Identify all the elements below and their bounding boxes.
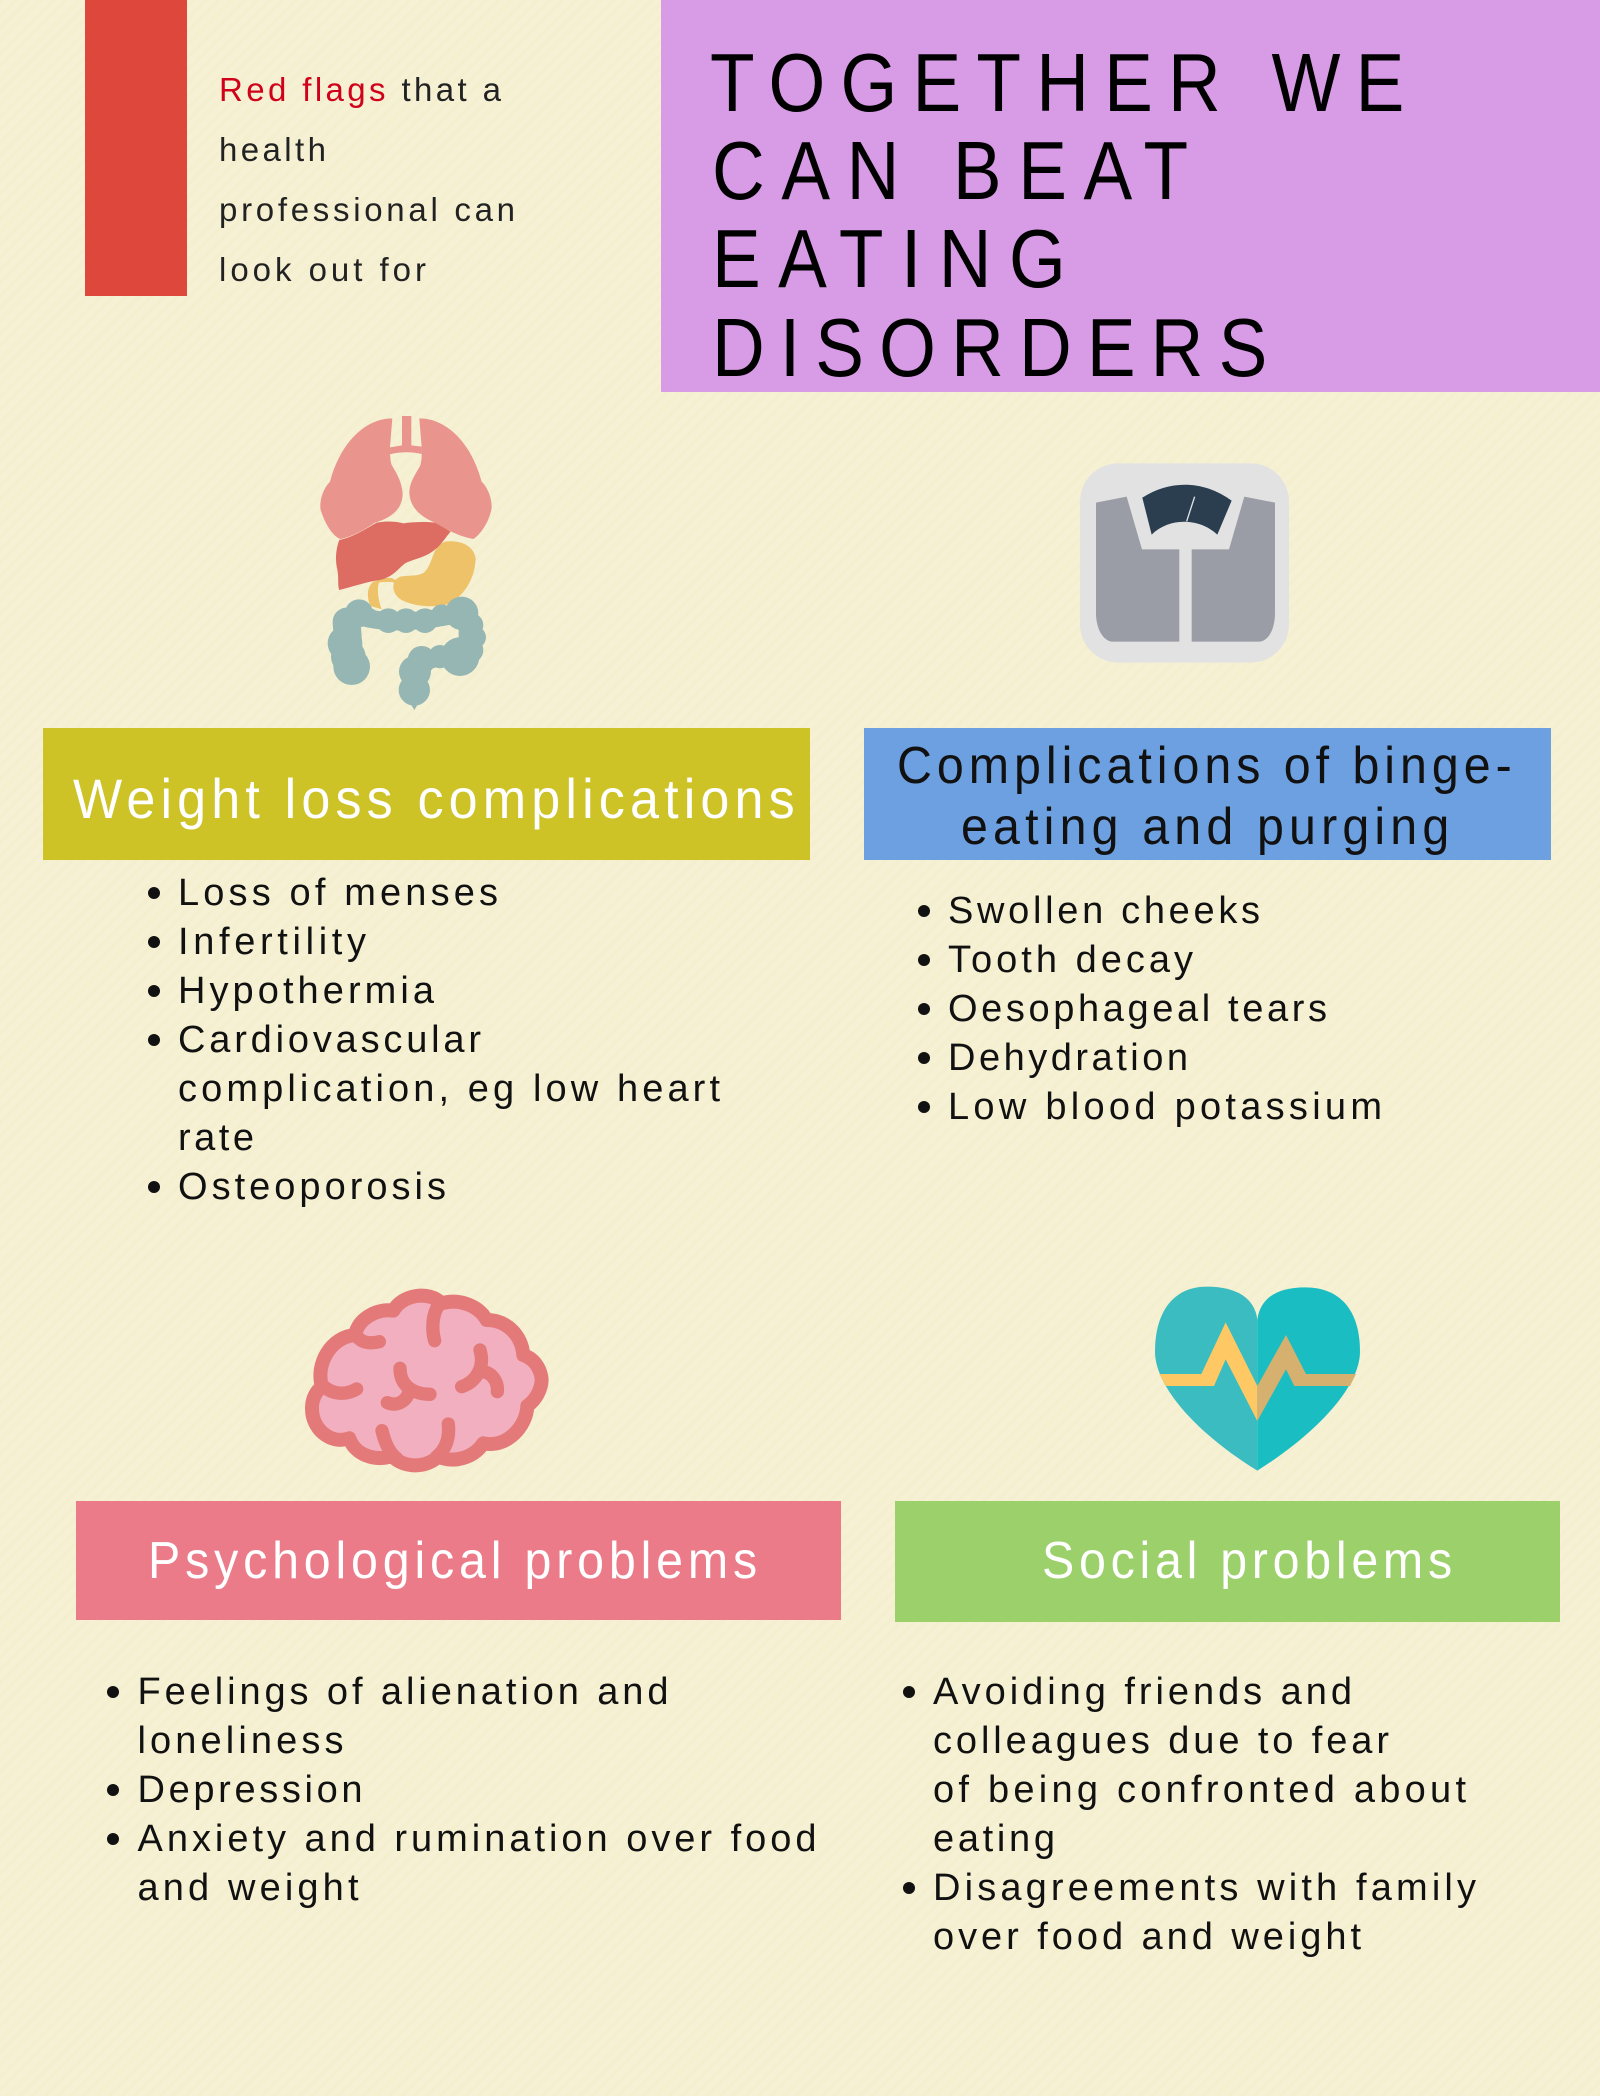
list: weight loss complications: Infertility	[178, 921, 366, 963]
panel: binge-eating heading: Complications of binge-	[897, 736, 1512, 794]
list: psychological problems: and weight	[138, 1867, 359, 1909]
list: social problems	[903, 1671, 1476, 1958]
icon: brain	[312, 1296, 542, 1465]
intro text: professional can	[219, 191, 515, 228]
list: binge-eating complications: Oesophageal tears	[948, 988, 1327, 1030]
panel: psychological heading: Psychological problems	[148, 1531, 757, 1589]
panel: binge-eating heading: eating and purging	[961, 797, 1449, 855]
title panel	[661, 0, 1600, 394]
icon: heart with pulse	[1155, 1287, 1360, 1471]
panel: social heading: Social problems	[1042, 1531, 1452, 1589]
list: binge-eating complications: Tooth decay	[948, 939, 1193, 981]
title: TOGETHER WE	[710, 36, 1404, 129]
list: social problems: Avoiding friends and	[933, 1671, 1352, 1713]
panel: weight loss heading	[43, 728, 810, 860]
icon: organs	[320, 416, 492, 710]
list: weight loss complications: complication, eg low heart	[178, 1068, 720, 1110]
intro text	[219, 71, 515, 288]
panel: social heading	[895, 1501, 1560, 1622]
list: weight loss complications: rate	[178, 1117, 254, 1159]
panel: weight loss heading: Weight loss complications	[73, 768, 795, 830]
list: psychological problems: loneliness	[138, 1720, 344, 1762]
list: psychological problems	[107, 1671, 816, 1909]
list: social problems: Disagreements with family	[933, 1867, 1476, 1909]
list: binge-eating complications: Swollen cheeks	[948, 890, 1260, 932]
list: weight loss complications	[148, 872, 720, 1208]
intro text: health	[219, 131, 326, 168]
list: binge-eating complications	[918, 890, 1382, 1128]
title	[710, 36, 1404, 394]
title: EATING	[712, 212, 1066, 305]
list: psychological problems: Anxiety and rumination over food	[138, 1818, 816, 1860]
list: binge-eating complications: Low blood potassium	[948, 1086, 1382, 1128]
list: weight loss complications: Osteoporosis	[178, 1166, 446, 1208]
list: weight loss complications: Cardiovascular	[178, 1019, 481, 1061]
list: social problems: over food and weight	[933, 1916, 1361, 1958]
list: weight loss complications: Loss of menses	[178, 872, 498, 914]
intro text: look out for	[219, 251, 426, 288]
list: weight loss complications: Hypothermia	[178, 970, 435, 1012]
list: social problems: of being confronted about	[933, 1769, 1466, 1811]
red accent bar	[85, 0, 187, 296]
list: binge-eating complications: Dehydration	[948, 1037, 1188, 1079]
icon: bathroom scale	[1080, 463, 1289, 663]
list: social problems: eating	[933, 1818, 1055, 1860]
list: psychological problems: Feelings of alienation and	[138, 1671, 668, 1713]
title: DISORDERS	[712, 301, 1267, 394]
list: psychological problems: Depression	[138, 1769, 362, 1811]
title: CAN BEAT	[712, 124, 1188, 217]
list: social problems: colleagues due to fear	[933, 1720, 1389, 1762]
intro text: Red flags that a	[219, 71, 502, 108]
panel: binge-eating heading	[864, 728, 1551, 860]
panel: psychological heading	[76, 1501, 841, 1620]
